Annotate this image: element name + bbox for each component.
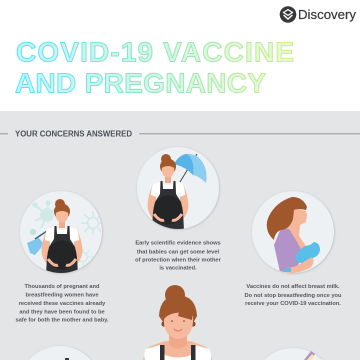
text: safety caption bbox=[15, 284, 109, 324]
title bbox=[15, 36, 294, 98]
text: safety caption: safe for both the mother and baby. bbox=[15, 318, 109, 324]
text: breast milk caption: receive your COVID-19 vaccination. bbox=[245, 301, 341, 307]
icon: pregnant woman with umbrella bbox=[137, 147, 219, 230]
text: breast milk caption: Vaccines do not affect breast milk. bbox=[246, 284, 340, 290]
section heading: your concerns answered: YOUR CONCERNS ANSWERED bbox=[15, 130, 132, 138]
logo: Discovery: Discovery bbox=[298, 8, 357, 22]
icon: breastfeeding mother bbox=[252, 191, 334, 274]
text: safety caption: Thousands of pregnant and bbox=[25, 284, 100, 290]
text: protection caption: Early scientific evidence shows bbox=[135, 241, 221, 247]
text: protection caption: that babies can get some level bbox=[137, 250, 220, 256]
panel: lower right circle bbox=[264, 348, 322, 360]
logo: Discovery bbox=[280, 6, 357, 23]
text: protection caption: is vaccinated. bbox=[159, 266, 197, 272]
text: safety caption: and they have been found to be bbox=[19, 309, 105, 315]
panel: safe for mother and baby bbox=[15, 191, 109, 324]
text: safety caption: breastfeeding women have bbox=[25, 293, 99, 299]
panel: lower left circle bbox=[29, 346, 91, 360]
panel: babies protected bbox=[135, 147, 222, 272]
title: AND PREGNANCY bbox=[15, 68, 266, 98]
text: breast milk caption: Do not stop breastfeeding once you bbox=[244, 293, 342, 299]
text: safety caption: received these vaccines already bbox=[19, 301, 106, 307]
panel: breastfeeding bbox=[244, 191, 342, 307]
text: protection caption: of protection when their mother bbox=[135, 258, 222, 264]
illustration: central woman bbox=[143, 285, 212, 360]
text: protection caption bbox=[135, 241, 222, 272]
icon: pregnant woman with vaccine and viruses bbox=[20, 191, 102, 275]
text: breast milk caption bbox=[244, 284, 342, 307]
title: COVID-19 VACCINE bbox=[16, 36, 294, 68]
background panel bbox=[0, 111, 360, 360]
